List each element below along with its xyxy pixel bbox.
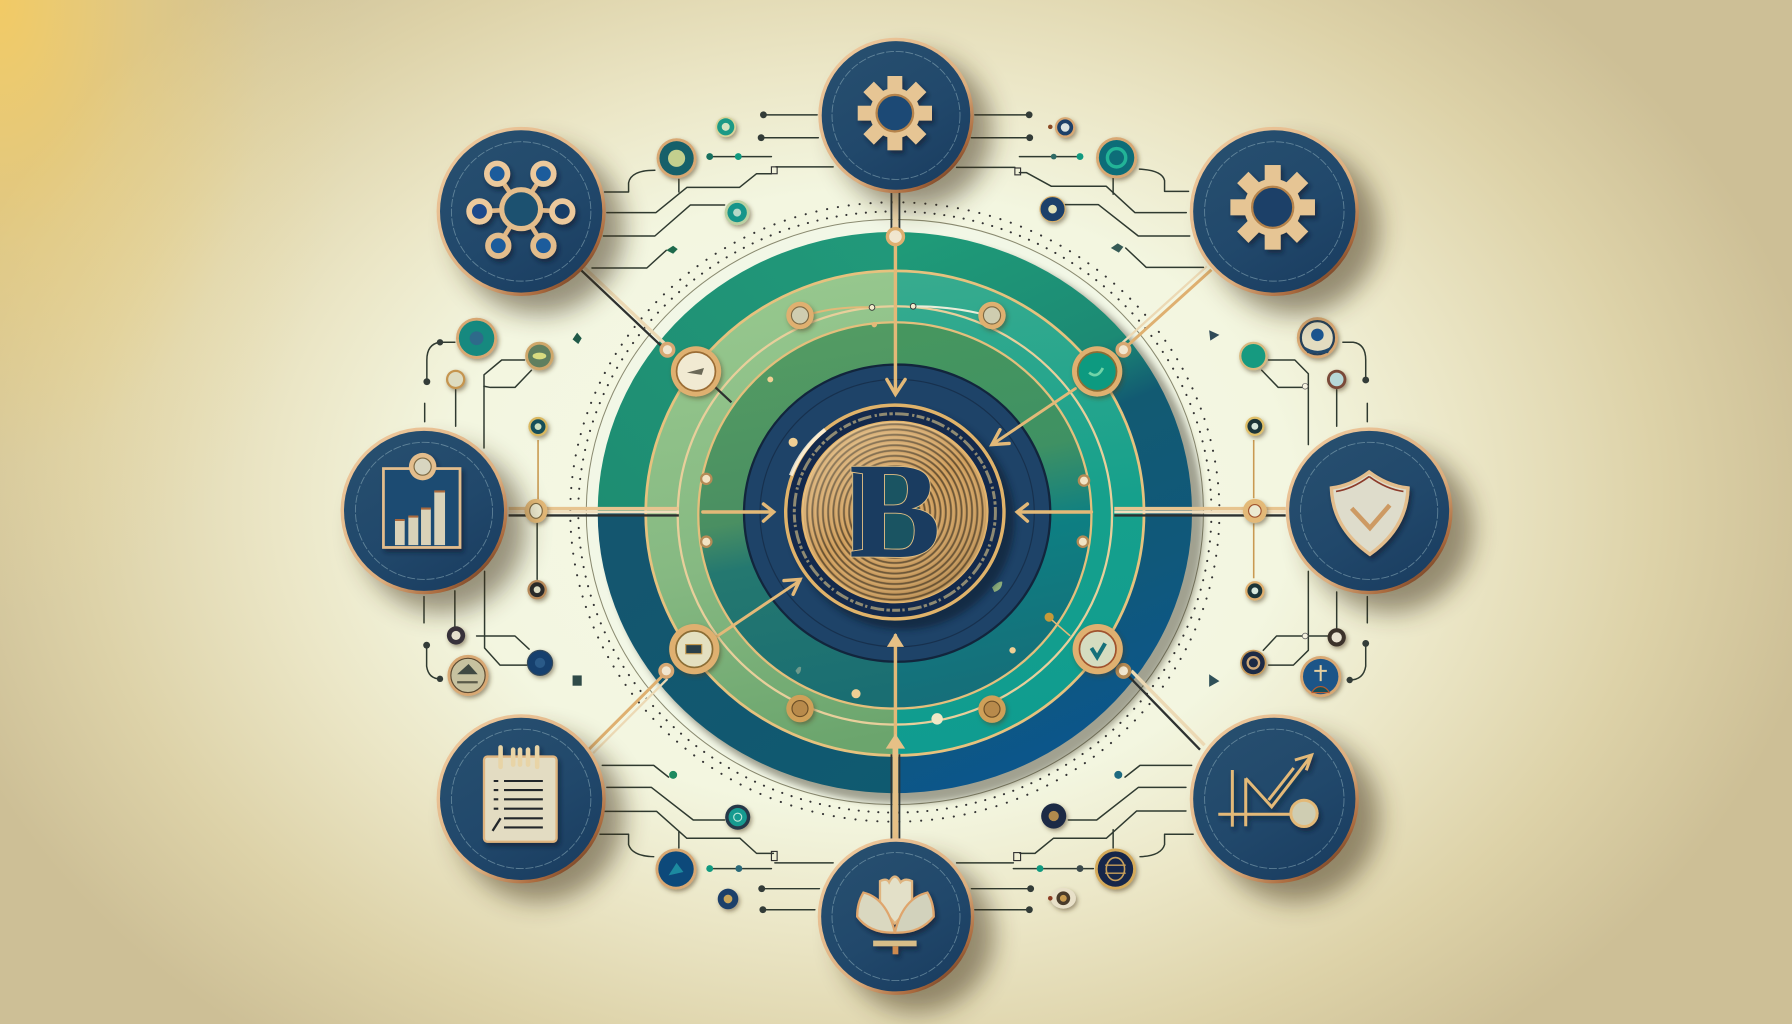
badge: bottom eye — [1048, 888, 1076, 909]
cream dots — [767, 376, 1054, 725]
icon: gear — [1230, 165, 1315, 250]
node: bar chart — [341, 427, 526, 613]
outer ring — [598, 232, 1192, 793]
bottom-right connector — [1117, 665, 1205, 750]
node: top gear — [818, 38, 992, 209]
badge: bottom blue — [655, 848, 697, 890]
circuit traces: top right — [957, 111, 1203, 267]
badge: bottom right navy — [1041, 803, 1066, 829]
top-left connector — [581, 267, 731, 402]
small ring nodes — [786, 302, 1006, 723]
outer ring shadow — [605, 239, 1203, 803]
badge: bottom teal — [725, 805, 750, 830]
right arrow — [1017, 504, 1286, 521]
bottom-left connector — [589, 579, 800, 753]
left arrow — [509, 504, 774, 521]
ring node: upper left — [671, 346, 721, 397]
coin rim — [786, 405, 1004, 619]
inner textured ring — [698, 322, 1091, 709]
badge: upper navy — [1040, 197, 1065, 222]
icon: clipboard — [484, 747, 557, 842]
ring node: lower right — [1073, 624, 1123, 674]
coin letter: B — [849, 435, 941, 587]
badge: mid left green — [528, 417, 548, 436]
ring node: upper right — [1072, 346, 1122, 397]
node: shield — [1286, 427, 1473, 613]
badge: left pale — [446, 370, 465, 389]
circuit traces: bottom left — [600, 765, 833, 913]
circuit traces: bottom right — [957, 765, 1193, 913]
top arrow — [887, 192, 905, 394]
inner ring connectors and dots — [701, 302, 1089, 725]
badge: right cream — [1297, 317, 1338, 358]
icon: lotus — [857, 877, 934, 954]
badge: right pale blue — [1327, 370, 1346, 389]
badge: upper teal — [725, 200, 750, 225]
badge: lower left ring — [447, 626, 465, 645]
coin — [786, 405, 1015, 630]
central target disc — [598, 232, 1203, 803]
coin shadow — [791, 410, 1015, 630]
top-right connector — [992, 266, 1211, 445]
badge: lower mid right — [1245, 581, 1265, 601]
icon: bar chart — [383, 453, 460, 547]
badge: lower left dark — [527, 580, 547, 599]
node: lotus — [818, 838, 994, 1013]
badge: lower right navy — [1240, 650, 1267, 676]
badge: top left small — [715, 117, 736, 137]
badge: right green — [1239, 342, 1268, 370]
ring node: lower left — [669, 624, 719, 674]
node: clipboard — [437, 714, 624, 902]
badge: lower right ring — [1328, 628, 1346, 647]
node: growth chart — [1190, 714, 1379, 902]
icon: gear — [858, 76, 932, 150]
badge: mid right — [1245, 417, 1265, 436]
dotted orbit rings — [570, 202, 1219, 822]
badge: lower right blue — [1300, 656, 1341, 697]
badge: bottom right globe — [1095, 848, 1136, 890]
bottom arrow — [886, 633, 905, 840]
side dots — [701, 474, 1089, 547]
badge: left olive — [525, 342, 554, 370]
badge: bottom navy small — [718, 889, 738, 909]
circuit traces: top left — [592, 111, 833, 268]
badge: left teal — [456, 318, 497, 359]
badge: top left teal — [657, 138, 697, 178]
node: network — [437, 127, 624, 314]
badge: lower left beige — [447, 655, 489, 696]
badge: lower left blue — [527, 650, 553, 675]
circuit traces: right — [1209, 330, 1369, 687]
icon: shield check — [1331, 472, 1408, 554]
middle green and teal ring — [646, 271, 1144, 755]
icon: growth arrow — [1218, 755, 1317, 827]
left junction ring — [525, 499, 547, 523]
node: top right gear — [1190, 127, 1379, 314]
badge: top right small — [1055, 117, 1075, 138]
coin engraved face — [802, 422, 987, 602]
circuit traces: left — [423, 333, 582, 686]
small satellite badges — [446, 117, 1346, 909]
right junction ring — [1243, 499, 1267, 523]
navy core — [744, 365, 1050, 662]
badge: top right teal — [1096, 137, 1137, 178]
icon: network hub — [469, 163, 573, 256]
